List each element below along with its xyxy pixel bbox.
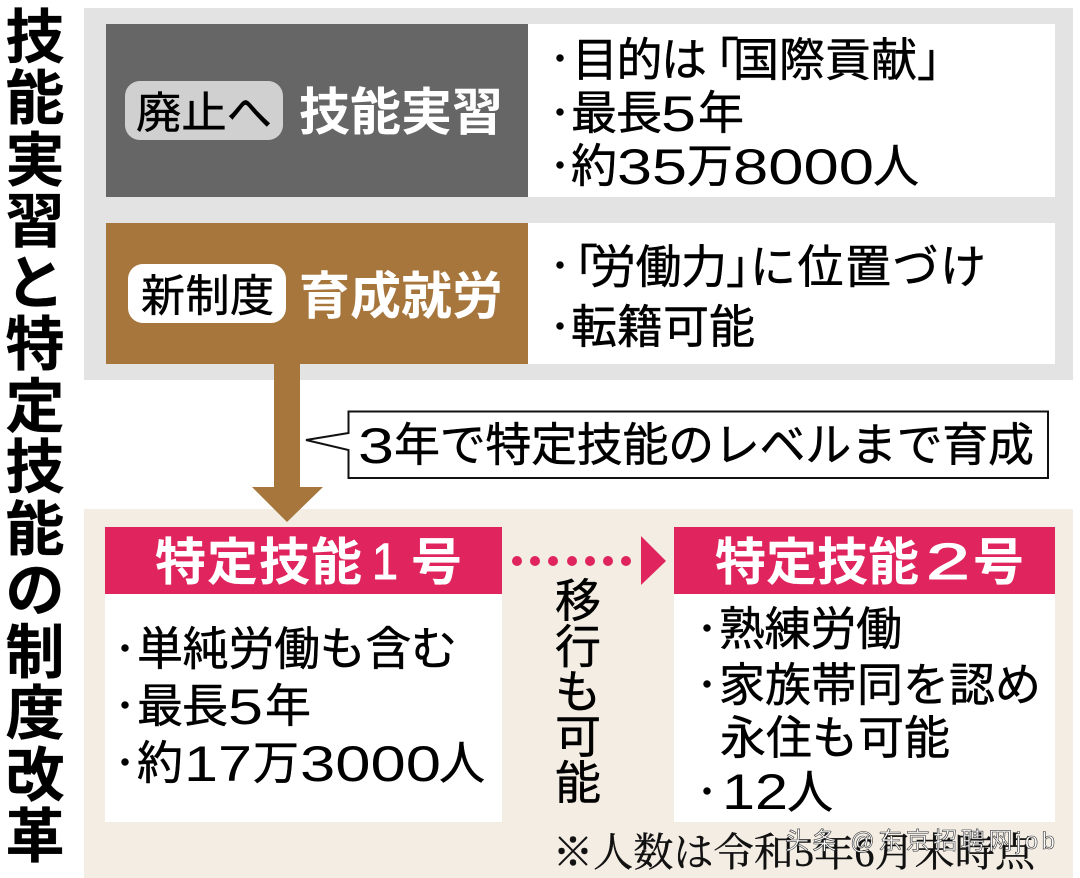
list: intern training facts: 目的は bbox=[572, 34, 707, 86]
watermark: 头条 @东京招聘网job bbox=[785, 828, 1055, 855]
list: no. 1 facts: 最長 bbox=[137, 680, 228, 732]
heading: employment for skill development: 育成就労 bbox=[299, 268, 503, 325]
list: intern training facts: 約 bbox=[571, 140, 617, 192]
label: transition also possible bbox=[555, 575, 601, 809]
list: no. 1 facts: 単純労働も含む bbox=[137, 623, 457, 675]
list: no. 2 facts: 家族帯同を認め bbox=[719, 659, 1041, 711]
list: new system facts: に位置づけ bbox=[750, 241, 986, 293]
list: no. 2 facts: 永住も可能 bbox=[720, 712, 950, 764]
callout: trained to specified-skill level in 3 years: 年で特定技能のレベルまで育成 bbox=[394, 419, 1034, 471]
list: intern training facts: 年 bbox=[698, 87, 744, 139]
list: intern training facts: 5 bbox=[661, 86, 696, 142]
title: vertical heading: 制 bbox=[5, 620, 65, 686]
list: no. 1 facts: 約 bbox=[137, 737, 183, 789]
title: vertical heading: 能 bbox=[5, 66, 65, 132]
list: new system facts: 「 bbox=[552, 241, 598, 293]
label: transition also possible: 可 bbox=[555, 711, 601, 763]
title: vertical heading: 技 bbox=[5, 435, 65, 501]
list: new system facts: 転籍可能 bbox=[571, 301, 755, 353]
list: new system facts: 」 bbox=[726, 241, 772, 293]
list: no. 1 facts: 人 bbox=[439, 737, 485, 789]
list: intern training facts: 35 bbox=[617, 139, 687, 195]
row: technical intern training bbox=[106, 24, 1055, 197]
list: no. 2 facts bbox=[704, 603, 1041, 820]
badge: new system bbox=[128, 264, 286, 323]
heading: specified skill 2: 2 bbox=[926, 533, 970, 590]
list: intern training facts: 万 bbox=[687, 140, 733, 192]
card: specified skill no. 2 bbox=[674, 527, 1055, 822]
panel: current and new systems bbox=[84, 8, 1073, 380]
heading: specified skill 2: 特定技能 bbox=[715, 534, 919, 591]
heading: specified skill 1: 1 bbox=[372, 533, 398, 590]
callout: trained to specified-skill level in 3 years bbox=[306, 412, 1048, 478]
title: vertical heading: の bbox=[5, 558, 65, 624]
heading: specified skill 1: 特定技能 bbox=[155, 534, 362, 591]
list: intern training facts bbox=[556, 34, 963, 195]
list: intern training facts: 「 bbox=[693, 34, 739, 86]
arrow: brown downward arrow bbox=[252, 364, 323, 522]
title: vertical heading: と bbox=[5, 251, 65, 317]
title: vertical heading: 習 bbox=[5, 189, 65, 255]
list: no. 1 facts bbox=[122, 623, 485, 792]
list: no. 2 facts: 人 bbox=[787, 766, 833, 818]
list: new system facts: 労働力 bbox=[590, 241, 727, 293]
panel: specified skilled worker bbox=[84, 509, 1073, 878]
list: intern training facts: 人 bbox=[873, 140, 919, 192]
list: no. 1 facts: 5 bbox=[228, 679, 263, 735]
list: intern training facts: 国際貢献 bbox=[733, 34, 917, 86]
heading: technical intern training: 技能実習 bbox=[299, 84, 503, 141]
label: transition also possible: 能 bbox=[555, 757, 601, 809]
list: no. 1 facts: 17 bbox=[184, 736, 252, 792]
list: no. 1 facts: 3000 bbox=[300, 736, 441, 792]
badge: to be abolished bbox=[125, 81, 283, 140]
heading: specified skill 1 bbox=[155, 533, 462, 591]
list: new system facts bbox=[552, 241, 986, 353]
list: intern training facts: 最長 bbox=[571, 87, 662, 139]
title: vertical heading: 度 bbox=[5, 681, 65, 747]
title: vertical heading: 技 bbox=[5, 5, 65, 71]
arrow: dotted transition arrow bbox=[512, 536, 666, 585]
badge: new system: 新制度 bbox=[141, 272, 274, 321]
list: intern training facts: 8000 bbox=[733, 139, 874, 195]
title: vertical heading: 定 bbox=[5, 374, 65, 440]
title: vertical heading: 改 bbox=[5, 743, 65, 809]
title: vertical heading: 実 bbox=[5, 128, 65, 194]
callout: trained to specified-skill level in 3 years: 3 bbox=[358, 418, 394, 474]
list: no. 2 facts: 12 bbox=[722, 764, 788, 820]
label: transition also possible: 行 bbox=[555, 621, 601, 673]
list: intern training facts: 」 bbox=[917, 34, 963, 86]
title: vertical heading: 能 bbox=[5, 497, 65, 563]
card: specified skill no. 1 bbox=[105, 527, 502, 822]
list: no. 2 facts: 熟練労働 bbox=[719, 603, 902, 655]
heading: specified skill 2: 号 bbox=[973, 534, 1024, 591]
footnote: counts as of June 2023: ※人数は令和5年6月末時点 bbox=[553, 830, 1036, 875]
title: vertical heading: 特 bbox=[5, 312, 65, 378]
title: vertical heading bbox=[5, 5, 65, 870]
heading: specified skill 1: 号 bbox=[411, 534, 462, 591]
label: transition also possible: も bbox=[555, 666, 601, 718]
label: transition also possible: 移 bbox=[555, 575, 601, 627]
list: no. 1 facts: 年 bbox=[265, 680, 311, 732]
row: new employment system bbox=[106, 223, 1055, 364]
list: no. 1 facts: 万 bbox=[253, 737, 299, 789]
title: vertical heading: 革 bbox=[5, 804, 65, 870]
badge: to be abolished: 廃止へ bbox=[136, 90, 272, 138]
heading: specified skill 2 bbox=[715, 533, 1024, 591]
